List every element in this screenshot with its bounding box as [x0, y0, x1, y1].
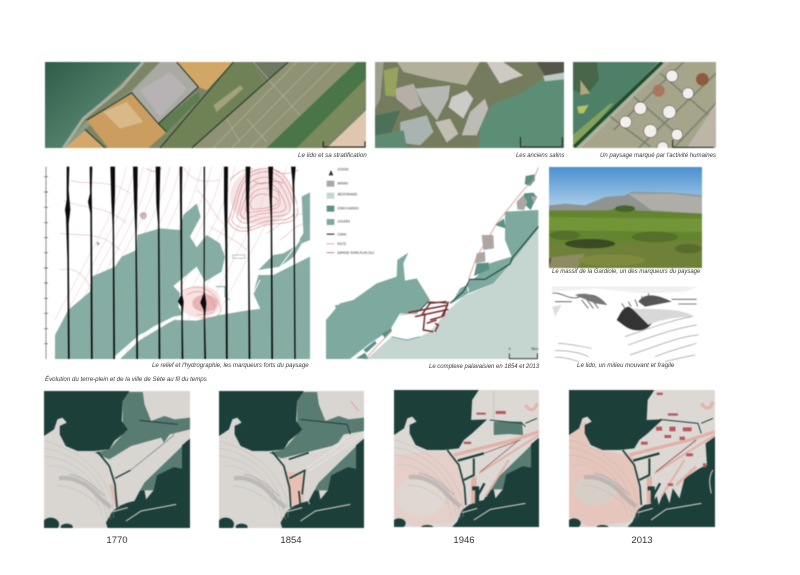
- lagoon shallows: [269, 392, 364, 459]
- photo: oil tanks: [572, 61, 717, 149]
- legend: MÉDITERRANÉE: [337, 192, 358, 197]
- hill contours: [44, 441, 114, 519]
- old town: [111, 484, 118, 508]
- legend: ROUTE: [337, 242, 346, 246]
- canals and basins: [447, 391, 537, 520]
- legend: LAGUNES: [337, 220, 350, 224]
- map: Sete 1854: [218, 390, 365, 529]
- caption: relief: Le relief et l'hydrographie, les marqueurs forts du paysage: [152, 362, 309, 369]
- black section lines: [65, 167, 296, 359]
- mountain contours: [140, 168, 298, 231]
- lagoons: [326, 210, 538, 359]
- map: Sete 2013: [568, 389, 716, 528]
- scale axis: [44, 167, 48, 359]
- scale bar: 0: [509, 347, 511, 351]
- legend: CANAL: [337, 232, 347, 236]
- sea: [281, 439, 364, 528]
- caption: lido drawing: Le lido, un milieu mouvant et fragile: [577, 362, 674, 369]
- sea: [452, 438, 539, 527]
- year: 1854: 1854: [280, 535, 302, 546]
- canals and roads: [272, 401, 364, 521]
- legend: [327, 167, 374, 255]
- drawing: lido dunes: [552, 286, 699, 362]
- caption: human activity: Un paysage marqué par l'activité humaines: [600, 153, 716, 159]
- scale bar: 5km: [531, 347, 538, 351]
- wetlands: [356, 174, 537, 359]
- scale bar: [509, 347, 538, 359]
- pink town layer: [394, 452, 466, 527]
- pink town layer: [569, 420, 641, 527]
- canal: [450, 227, 538, 303]
- sea: [367, 228, 538, 359]
- lagoons: [55, 192, 310, 359]
- canals and lido details: [115, 193, 303, 357]
- hill contours: [219, 441, 288, 519]
- terre-plein tangle: [408, 302, 448, 332]
- map: palavas complex: [325, 166, 540, 360]
- caption: lido: Le lido et sa stratification: [298, 152, 367, 159]
- canals and basins: [623, 418, 713, 520]
- legend: ZONES HUMIDES: [337, 207, 359, 211]
- canal and road: [98, 420, 178, 521]
- caption: Gardiole: Le massif de la Gardiole, un des marqueurs du paysage: [552, 269, 700, 275]
- sea: [628, 437, 715, 527]
- industrial strips: [454, 432, 539, 503]
- year: 1770: 1770: [106, 535, 128, 546]
- etang de Thau: [394, 390, 487, 450]
- etang de Thau: [219, 391, 304, 451]
- legend: EMPRISE TERRE-PLEIN 2013: [337, 251, 374, 255]
- industrial zones: [629, 432, 715, 503]
- buildings: [464, 411, 506, 444]
- photo: former salt pans: [374, 61, 565, 149]
- legend: LÉGENDE: [337, 167, 349, 172]
- lagoon shallows: [94, 392, 190, 459]
- year: 1946: 1946: [453, 535, 475, 546]
- marshes: [475, 195, 538, 263]
- photo: massif de la Gardiole: [548, 166, 703, 269]
- year: 2013: 2013: [631, 535, 653, 546]
- photo: lido aerial view: [44, 61, 367, 149]
- etang de Thau: [569, 390, 663, 450]
- town blocks: [286, 471, 304, 506]
- caption: salt pans: Les anciens salins: [516, 153, 565, 159]
- relief contours: [40, 167, 307, 357]
- lagoon shallows: [494, 422, 523, 435]
- etang de Thau: [44, 391, 129, 451]
- map: Sete 1770: [43, 390, 191, 529]
- sea: [106, 439, 190, 528]
- roads: [367, 167, 538, 357]
- caption: palavas complex: Le complexe palavaisien en 1854 et 2013: [429, 364, 539, 370]
- heading: evolution of the terre-plein: Évolution du terre-plein et de la ville de Sète au fil du temps: [45, 376, 207, 383]
- map: Sete 1946: [393, 389, 540, 528]
- hill contours: [569, 440, 639, 518]
- hill contours: [394, 440, 463, 518]
- map: relief and hydrography: [44, 166, 311, 360]
- Sete hill: [179, 286, 221, 318]
- buildings: [641, 393, 706, 486]
- legend: MARAIS: [337, 181, 349, 185]
